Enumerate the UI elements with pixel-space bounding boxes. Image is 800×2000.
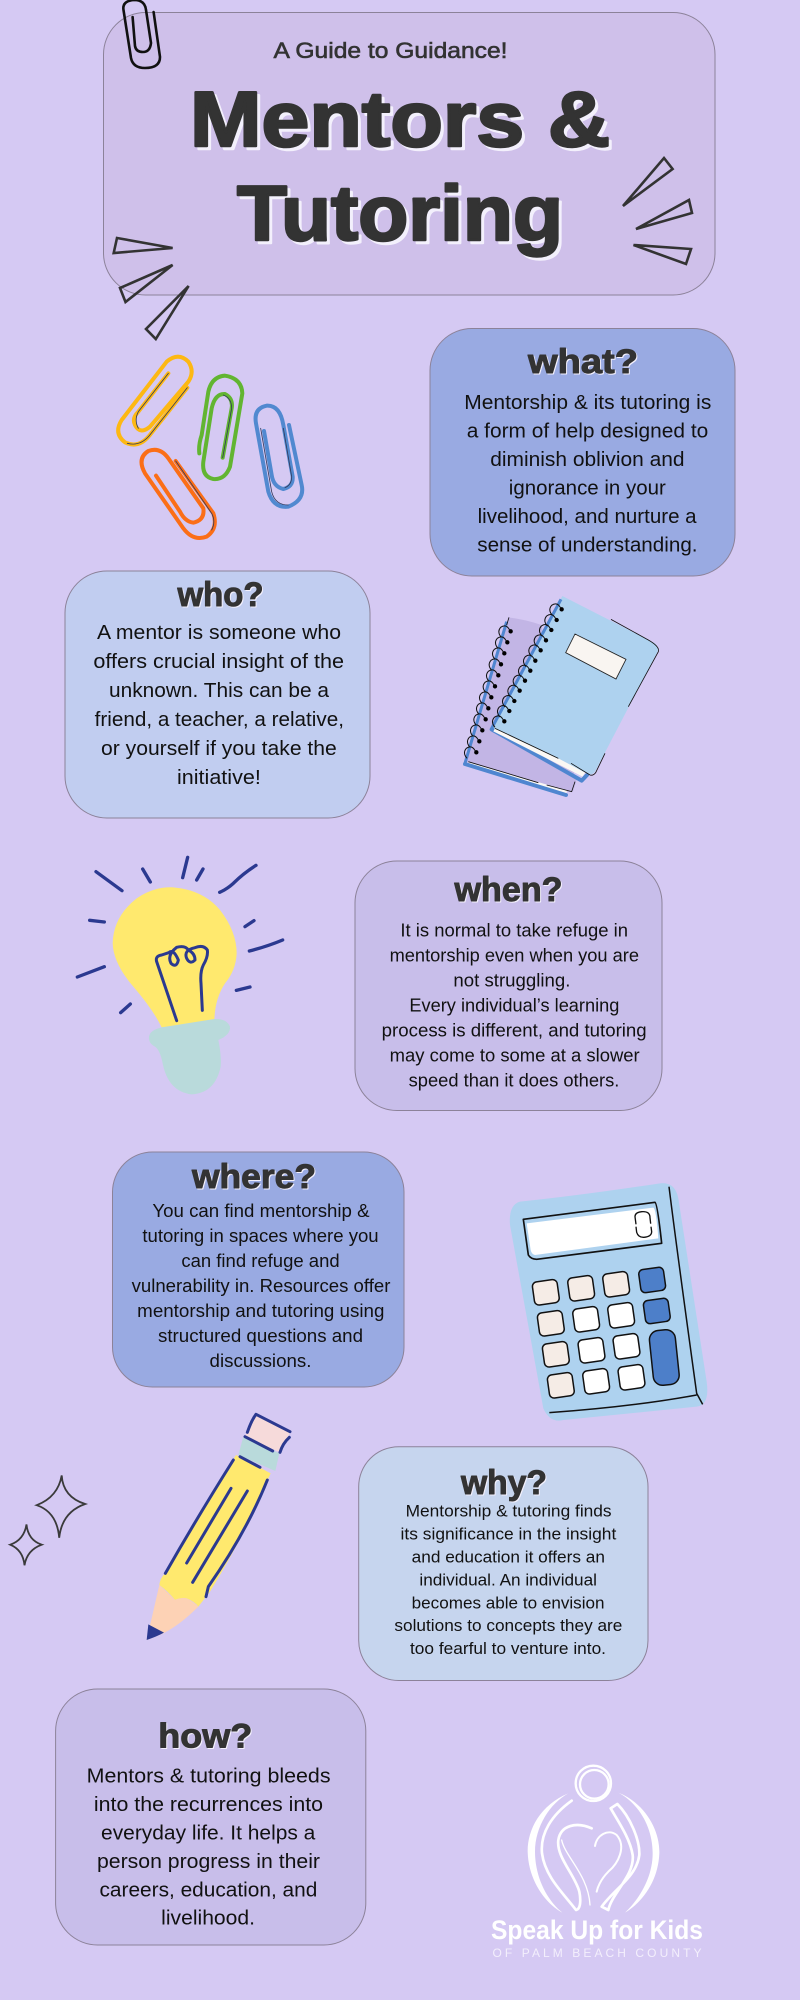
logo: Speak Up for Kids bbox=[491, 1766, 703, 1960]
heading: why: why? bbox=[460, 1464, 547, 1502]
icon: calculator bbox=[510, 1183, 707, 1421]
text: where: tutoring in spaces where you bbox=[142, 1226, 379, 1246]
blue notebook bbox=[492, 596, 659, 781]
text: when: speed than it does others. bbox=[409, 1070, 619, 1090]
icon: colored paperclips bbox=[118, 357, 302, 538]
lilac notebook bbox=[464, 617, 577, 795]
calculator screen bbox=[523, 1202, 662, 1259]
title: Mentors & bbox=[190, 75, 610, 163]
heading: how: how? bbox=[158, 1718, 252, 1756]
text: what: Mentorship & its tutoring is bbox=[464, 392, 711, 414]
heading: what: what? bbox=[527, 343, 638, 381]
pencil eraser bbox=[245, 1414, 290, 1452]
text: what: a form of help designed to bbox=[467, 420, 708, 442]
text: how bbox=[87, 1766, 331, 1930]
green paperclip bbox=[199, 376, 242, 479]
text: how: into the recurrences into bbox=[94, 1794, 323, 1816]
text: where: mentorship and tutoring using bbox=[137, 1301, 384, 1321]
pencil ferrule bbox=[238, 1437, 279, 1471]
text: when: may come to some at a slower bbox=[390, 1046, 640, 1066]
bulb glass bbox=[113, 887, 237, 1027]
calculator body bbox=[510, 1183, 707, 1421]
logo mark bbox=[528, 1766, 659, 1913]
text: how: livelihood. bbox=[161, 1908, 255, 1930]
blue paperclip bbox=[256, 406, 302, 507]
panel: why bbox=[359, 1447, 648, 1680]
text: why: too fearful to venture into. bbox=[410, 1639, 606, 1658]
text: who: initiative! bbox=[177, 767, 261, 789]
text: why bbox=[394, 1502, 622, 1658]
icon: title burst lines bbox=[114, 158, 692, 339]
text: where: You can find mentorship & bbox=[152, 1201, 370, 1221]
text: what bbox=[464, 392, 711, 556]
text: why: its significance in the insight bbox=[400, 1525, 617, 1544]
text: why: Mentorship & tutoring finds bbox=[406, 1502, 612, 1521]
text: who: unknown. This can be a bbox=[109, 680, 330, 702]
text: why: solutions to concepts they are bbox=[394, 1616, 622, 1635]
icon: sparkles bbox=[10, 1475, 85, 1565]
filament bbox=[156, 946, 207, 1021]
text: where: structured questions and bbox=[158, 1326, 363, 1346]
panel: title bbox=[104, 12, 715, 295]
text: who: friend, a teacher, a relative, bbox=[95, 709, 344, 731]
subtitle: A Guide to Guidance! bbox=[274, 38, 508, 63]
text: when: It is normal to take refuge in bbox=[400, 920, 628, 940]
heading: where: where? bbox=[191, 1158, 316, 1196]
panel: how bbox=[56, 1689, 366, 1945]
text: why: becomes able to envision bbox=[412, 1593, 605, 1612]
pencil wood tip bbox=[147, 1585, 198, 1640]
title bbox=[190, 75, 610, 257]
panel: who bbox=[65, 571, 370, 818]
text: where: vulnerability in. Resources offer bbox=[132, 1276, 390, 1296]
text: what: ignorance in your bbox=[509, 478, 666, 500]
pencil outlines bbox=[165, 1414, 290, 1597]
text: how: everyday life. It helps a bbox=[101, 1822, 316, 1844]
icon: light bulb bbox=[77, 857, 283, 1094]
panel: when bbox=[355, 861, 662, 1110]
text: how: Mentors & tutoring bleeds bbox=[87, 1766, 331, 1788]
text: when bbox=[382, 920, 647, 1090]
text: what: sense of understanding. bbox=[477, 534, 698, 556]
text: when: mentorship even when you are bbox=[390, 946, 639, 966]
icon: notebooks bbox=[464, 596, 659, 795]
icon: black paperclip bbox=[123, 0, 160, 68]
text: why: individual. An individual bbox=[419, 1570, 597, 1589]
pencil lead bbox=[147, 1624, 164, 1640]
text: why: and education it offers an bbox=[412, 1548, 605, 1566]
logo name: Speak Up for Kids bbox=[491, 1915, 703, 1945]
icon: pencil bbox=[147, 1414, 290, 1640]
text: who bbox=[93, 622, 344, 789]
text: what: diminish oblivion and bbox=[490, 449, 685, 471]
calculator buttons bbox=[532, 1267, 680, 1399]
text: what: livelihood, and nurture a bbox=[478, 506, 697, 528]
text: when: not struggling. bbox=[453, 970, 570, 990]
panel: where bbox=[112, 1152, 404, 1387]
orange paperclip bbox=[142, 450, 215, 538]
pencil body bbox=[159, 1455, 271, 1607]
text: where: can find refuge and bbox=[181, 1251, 340, 1271]
yellow paperclip bbox=[118, 357, 192, 445]
text: how: person progress in their bbox=[97, 1851, 320, 1873]
text: where bbox=[132, 1201, 390, 1371]
heading: when: when? bbox=[453, 871, 562, 909]
text: who: offers crucial insight of the bbox=[93, 651, 344, 673]
panel: what bbox=[430, 328, 735, 576]
text: where: discussions. bbox=[210, 1351, 311, 1371]
bulb rays bbox=[77, 857, 283, 1013]
text: who: A mentor is someone who bbox=[97, 622, 341, 644]
title: Tutoring bbox=[237, 169, 563, 257]
bulb base bbox=[149, 1019, 230, 1094]
notebook label bbox=[566, 634, 626, 679]
text: when: process is different, and tutoring bbox=[382, 1020, 647, 1040]
logo tagline: OF PALM BEACH COUNTY bbox=[492, 1946, 702, 1960]
text: when: Every individual’s learning bbox=[409, 996, 619, 1016]
heading: who: who? bbox=[177, 576, 264, 614]
text: how: careers, education, and bbox=[100, 1879, 317, 1901]
text: who: or yourself if you take the bbox=[101, 738, 337, 760]
